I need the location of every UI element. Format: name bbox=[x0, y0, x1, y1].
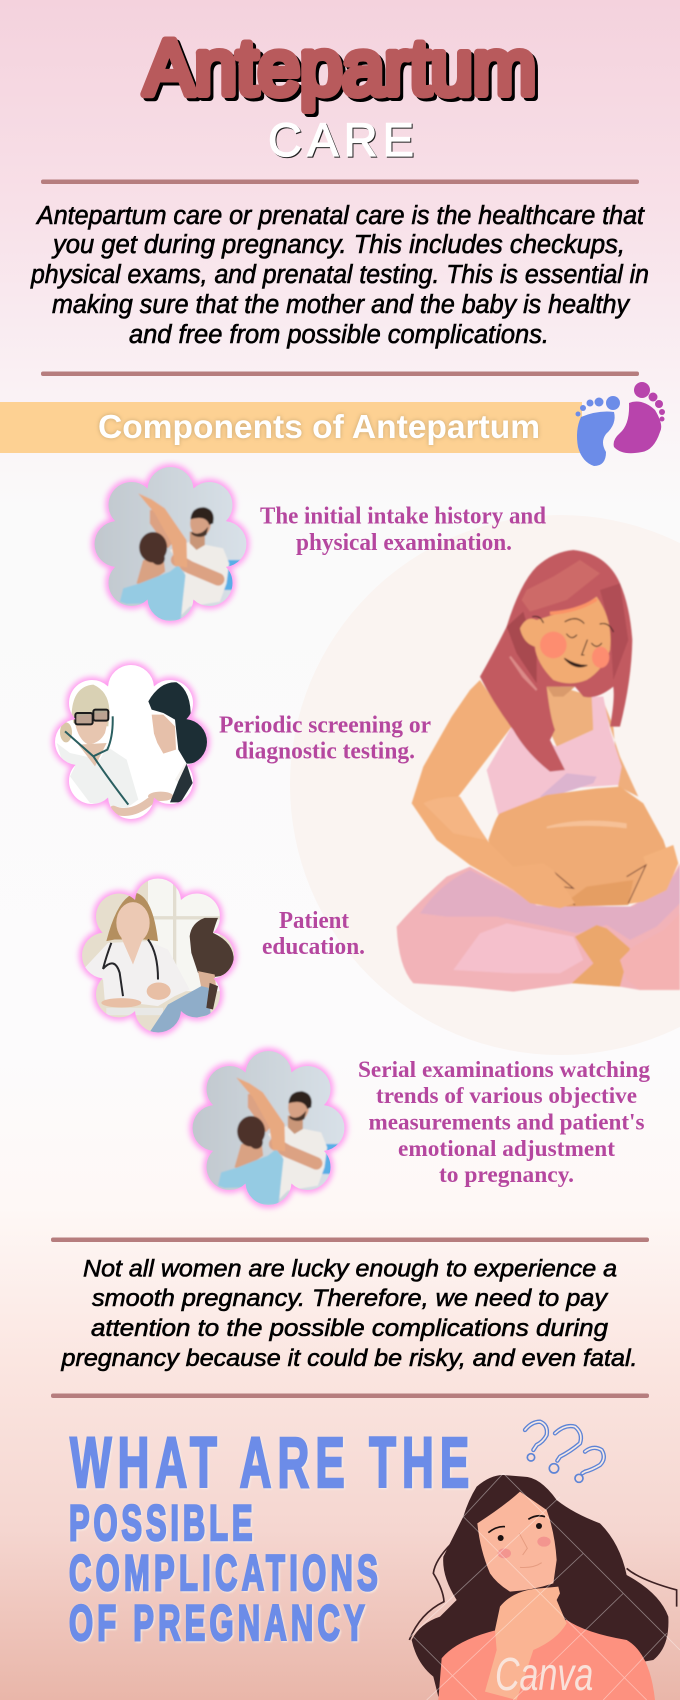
text: periodic screening: Periodic screening or bbox=[219, 712, 431, 738]
left arm bbox=[412, 680, 575, 908]
title: Antepartum: Antepartum bbox=[144, 23, 536, 111]
illustration: thinking woman bbox=[409, 1473, 680, 1700]
icon: baby footprints bbox=[576, 382, 665, 466]
watermark lattice bbox=[410, 1473, 680, 1700]
intro paragraph: physical exams, and prenatal testing. This is essential in bbox=[30, 261, 649, 289]
heading: what are the possible complications bbox=[69, 1423, 469, 1651]
photo flower 1: physical examination bbox=[87, 457, 253, 627]
top bbox=[487, 697, 622, 815]
closing paragraph bbox=[60, 1256, 638, 1372]
face bbox=[477, 1492, 557, 1592]
text: serial examinations: to pregnancy. bbox=[439, 1162, 574, 1187]
text: patient education: Patient bbox=[279, 907, 350, 934]
heading: what are the possible complications: POSSIBLE bbox=[69, 1494, 253, 1551]
banner: Components of Antepartum bbox=[0, 402, 582, 453]
right arm bbox=[602, 697, 638, 797]
face bbox=[520, 597, 611, 683]
hand and arm bbox=[485, 1587, 567, 1700]
text: serial examinations: emotional adjustment bbox=[398, 1136, 615, 1161]
illustration: pregnant woman bbox=[397, 550, 680, 992]
text: initial intake bbox=[260, 502, 546, 556]
text: patient education bbox=[262, 907, 365, 960]
closing paragraph: pregnancy because it could be risky, and even fatal. bbox=[60, 1345, 638, 1372]
text: serial examinations: trends of various objective bbox=[376, 1083, 637, 1108]
heading: what are the possible complications: OF PREGNANCY bbox=[69, 1594, 365, 1651]
backdrop circle behind pregnant woman bbox=[290, 515, 680, 1055]
body bbox=[438, 1620, 655, 1700]
facial features bbox=[498, 1535, 504, 1541]
subtitle: CARE: CARE bbox=[268, 113, 414, 166]
photo flower 2: screening bbox=[47, 656, 213, 826]
intro paragraph: you get during pregnancy. This includes checkups, bbox=[51, 231, 625, 259]
heading: what are the possible complications: COMPLICATIONS bbox=[69, 1544, 378, 1601]
intro paragraph: making sure that the mother and the baby is healthy bbox=[52, 291, 631, 319]
banner: Components of Antepartum: Components of Antepartum bbox=[98, 408, 540, 445]
belly bbox=[488, 787, 673, 907]
heading: what are the possible complications: WHAT ARE THE bbox=[70, 1423, 469, 1503]
text: periodic screening: diagnostic testing. bbox=[235, 738, 415, 764]
text: initial intake: physical examination. bbox=[296, 529, 512, 556]
closing paragraph: attention to the possible complications during bbox=[91, 1315, 609, 1342]
icon: question marks bbox=[525, 1422, 604, 1482]
right hand bbox=[627, 845, 678, 904]
text: serial examinations: measurements and patient's bbox=[368, 1110, 645, 1134]
closing paragraph: Not all women are lucky enough to experience a bbox=[83, 1256, 617, 1282]
photo flower 4: serial examinations bbox=[185, 1041, 351, 1211]
text: serial examinations: Serial examinations watching bbox=[358, 1057, 651, 1082]
text: periodic screening bbox=[219, 712, 431, 764]
hair bbox=[412, 1475, 668, 1697]
facial features bbox=[533, 616, 613, 655]
text: patient education: education. bbox=[262, 933, 365, 960]
text: initial intake: The initial intake history and bbox=[260, 502, 546, 530]
intro paragraph: Antepartum care or prenatal care is the healthcare that bbox=[35, 202, 645, 230]
closing paragraph: smooth pregnancy. Therefore, we need to pay bbox=[92, 1285, 609, 1312]
intro paragraph bbox=[30, 202, 649, 349]
text: serial examinations bbox=[358, 1057, 651, 1187]
neck and chest bbox=[543, 682, 593, 747]
legs and feet bbox=[397, 863, 680, 992]
watermark: Canva: Canva bbox=[495, 1648, 593, 1700]
photo flower 3: patient education bbox=[75, 870, 241, 1039]
hair bbox=[480, 550, 632, 772]
intro paragraph: and free from possible complications. bbox=[129, 321, 549, 349]
